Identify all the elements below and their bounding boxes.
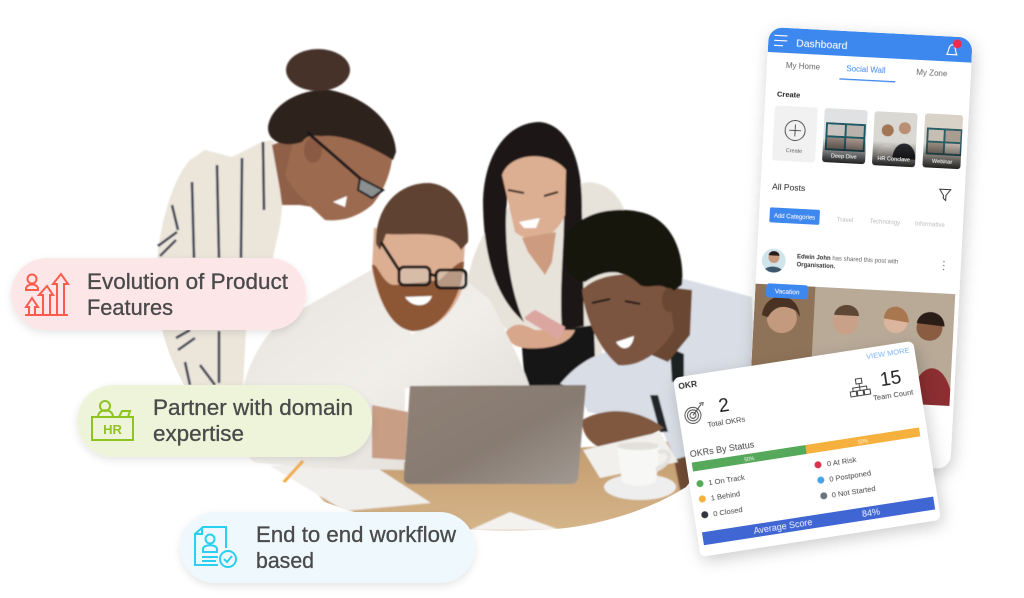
heading: dashboard: Dashboard — [796, 37, 848, 52]
thumbnail: webinar: Webinar — [932, 159, 953, 166]
category filters: Travel — [837, 217, 853, 224]
OKR card — [673, 341, 941, 557]
text: evolution label: Features — [87, 295, 173, 320]
icon: HR box: HR — [103, 422, 122, 437]
phone header — [768, 27, 973, 63]
status bar: 50% — [858, 438, 869, 446]
thumbnail: deep dive — [822, 108, 868, 164]
pill: evolution of product features — [11, 258, 306, 330]
average score bar: Average Score — [753, 517, 813, 536]
status legend: 0 At Risk — [826, 455, 857, 468]
laptop — [404, 385, 586, 484]
status legend: 0 Postponed — [829, 468, 872, 484]
average score bar: 84% — [861, 506, 881, 519]
metric: total OKRs: Total OKRs — [707, 414, 746, 429]
create heading: Create — [777, 90, 801, 100]
status heading: OKRs By Status — [689, 439, 755, 459]
man in dotted shirt — [560, 210, 755, 490]
pencil — [283, 461, 303, 483]
average score bar — [702, 497, 935, 545]
view more link: VIEW MORE — [865, 346, 910, 361]
OKR heading: OKR — [678, 378, 698, 391]
status legend: 0 Not Started — [831, 484, 876, 500]
icon: growth arrows and person — [25, 274, 68, 315]
create card: Create — [786, 148, 802, 155]
vacation tag: Vacation — [775, 288, 800, 296]
tabs: My Zone — [916, 68, 948, 78]
icon: document with check — [195, 527, 236, 567]
post author — [762, 248, 945, 273]
phone mockup — [746, 27, 973, 469]
metric: team count: Team Count — [873, 387, 915, 403]
metric: total OKRs: 2 — [717, 395, 731, 417]
category filters: Informative — [915, 221, 945, 229]
category filters — [769, 207, 944, 227]
thumbnail: deep dive: Deep Dive — [831, 153, 857, 161]
icon: menu — [774, 35, 788, 46]
thumbnail: HR conclave: HR Conclave — [877, 156, 910, 164]
all posts heading: All Posts — [772, 181, 805, 193]
vacation tag — [766, 283, 809, 299]
woman with phone — [465, 122, 628, 386]
status legend — [696, 453, 876, 520]
text: workflow label: End to end workflow — [256, 522, 456, 547]
thumbnail: webinar — [922, 113, 964, 169]
status legend: 1 Behind — [710, 489, 741, 503]
text: partner label: expertise — [153, 421, 244, 446]
metric: team count: 15 — [879, 367, 903, 391]
create card — [772, 105, 818, 163]
status bar: 50% — [744, 456, 755, 463]
man with glasses and beard — [240, 183, 530, 470]
pill: end to end workflow — [180, 512, 475, 583]
paper on table — [270, 462, 431, 511]
tabs — [786, 62, 948, 83]
text: evolution label: Evolution of Product — [87, 269, 288, 294]
category filters: Add Categories — [774, 214, 815, 222]
table — [318, 440, 682, 531]
icon: notification bell — [947, 39, 962, 55]
icon: filter — [939, 189, 951, 201]
coffee cup — [604, 442, 676, 500]
woman in striped shirt — [157, 49, 396, 386]
metric: team count — [869, 366, 915, 403]
tabs: Social Wall — [846, 64, 886, 75]
notebook on table — [583, 432, 678, 478]
category filters: Technology — [870, 219, 900, 227]
bottom paper — [470, 512, 560, 530]
thumbnail: HR conclave — [872, 111, 918, 167]
metric: total OKRs — [704, 393, 746, 429]
icon: target — [683, 403, 706, 425]
icon: HR box — [92, 401, 133, 440]
text: partner label: Partner with domain — [153, 395, 353, 420]
icon: team hierarchy — [848, 377, 871, 397]
post author: Organisation. — [796, 262, 836, 270]
post image — [750, 284, 959, 406]
text: workflow label: based — [256, 548, 314, 573]
status legend: 1 On Track — [708, 473, 746, 487]
post author: Edwin John has shared this post with — [797, 254, 898, 266]
icon: bookmark — [900, 397, 909, 410]
status legend: 0 Closed — [713, 505, 743, 518]
status bar — [692, 427, 920, 472]
pill: partner with domain expertise — [77, 385, 372, 457]
tabs: My Home — [786, 61, 821, 72]
team photo — [157, 49, 755, 545]
